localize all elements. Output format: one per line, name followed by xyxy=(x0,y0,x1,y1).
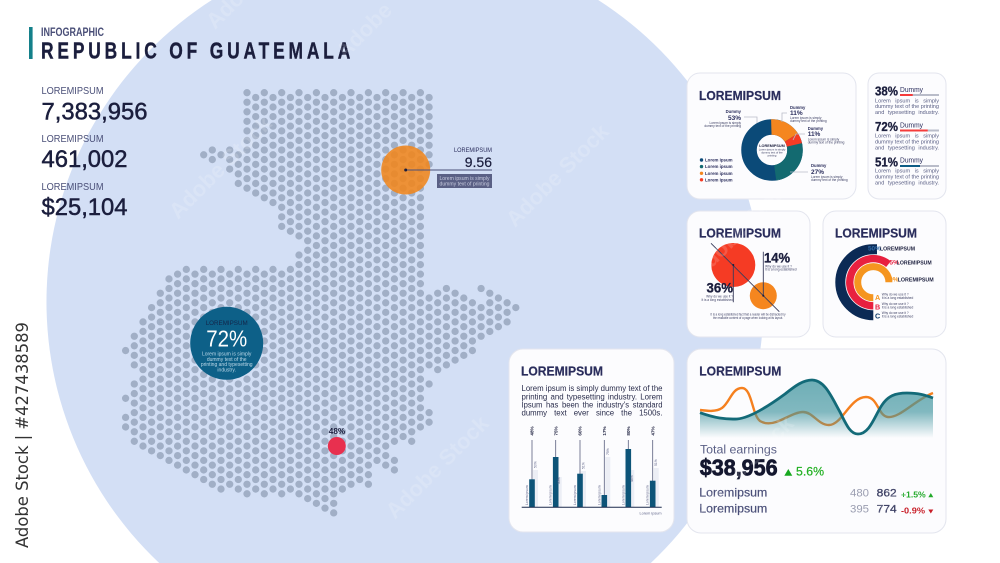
bar value labels: 75% xyxy=(553,426,558,436)
description text: Ipsum has been the industry's standard xyxy=(522,400,662,409)
legend: Lorem ipsum xyxy=(705,171,733,176)
bar axis labels xyxy=(525,448,662,515)
bar axis labels: Lorem ipsum xyxy=(525,485,529,505)
legend: Lorem ipsum xyxy=(705,164,733,169)
row 51%: 51% xyxy=(875,156,898,170)
panel: bubble comparison: 14% xyxy=(764,249,791,265)
description text: dummy text ever since the 1500s. xyxy=(522,409,662,418)
row 38%: Dummy xyxy=(900,87,923,94)
panel: radial rings: B xyxy=(875,302,880,311)
callout: blue circle 72%: LOREMIPSUM xyxy=(206,320,248,327)
leader lines xyxy=(744,113,808,172)
row 2 xyxy=(699,502,933,516)
title block: REPUBLIC OF GUATEMALA xyxy=(41,38,354,64)
panel: radial rings: 80% xyxy=(886,277,899,284)
bar axis labels: 50% xyxy=(534,461,538,468)
key statistics xyxy=(42,85,148,221)
donut xyxy=(749,127,795,173)
bar axis labels: 35% xyxy=(557,477,561,484)
panel: donut chart: dummy text of the printing xyxy=(811,178,848,182)
panel: donut chart: printing xyxy=(768,154,777,158)
callout: blue circle 72%: 72% xyxy=(206,326,247,352)
key statistics: 461,002 xyxy=(42,146,128,173)
bars xyxy=(522,440,662,507)
line chart xyxy=(700,380,933,438)
row 2: 395 xyxy=(850,504,869,516)
callout: blue circle 72%: Lorem ipsum is simply xyxy=(202,351,252,357)
panel: donut chart: LOREMIPSUM xyxy=(699,89,781,103)
panel: bubble comparison: It is a long established fact that a reader will be distracted by xyxy=(710,313,786,317)
panel: radial rings: LOREMIPSUM xyxy=(897,260,932,266)
callout: orange circle 9.56: LOREMIPSUM xyxy=(454,147,492,154)
bar axis labels: Lorem ipsum xyxy=(621,485,625,505)
panel: donut chart: 11% xyxy=(790,110,803,117)
panel: bubble comparison: 36% xyxy=(706,279,734,295)
panel: donut chart: LOREMIPSUM xyxy=(759,143,785,148)
watermarks: Adobe Stock xyxy=(686,170,799,284)
callout: orange circle 9.56: Lorem ipsum is simply xyxy=(440,176,490,182)
title block: INFOGRAPHIC xyxy=(41,25,104,39)
row 38%: and typesetting industry. xyxy=(875,110,939,116)
row 72% xyxy=(875,120,939,152)
panel: donut chart: Lorem ipsum is simply xyxy=(811,175,843,179)
row 72%: Dummy xyxy=(900,122,923,129)
row 1: 480 xyxy=(850,488,869,500)
description text xyxy=(522,384,663,418)
panel: bar chart: LOREMIPSUM xyxy=(521,365,603,379)
panel: radial rings: 75% xyxy=(886,259,899,266)
description text: printing and typesetting industry. Lorem xyxy=(522,392,663,401)
callout: red dot 48% xyxy=(328,427,346,455)
callout: blue circle 72% xyxy=(190,307,263,380)
callout: red dot 48%: 48% xyxy=(329,427,346,436)
panel: donut chart: 27% xyxy=(811,169,824,176)
panel: donut chart: dummy text of the printing xyxy=(704,124,741,128)
bar axis labels: Lorem ipsum xyxy=(549,485,553,505)
panel: earnings: $38,956 xyxy=(700,455,778,481)
panel: donut chart: Lorem ipsum is simply xyxy=(709,121,741,125)
callout: orange circle 9.56 xyxy=(381,146,492,194)
bar axis labels: Lorem ipsum xyxy=(573,485,577,505)
panel: radial rings: C xyxy=(875,311,880,320)
stock id vertical text: Adobe Stock | #427438589 xyxy=(13,322,32,548)
panel: radial rings: LOREMIPSUM xyxy=(880,246,915,252)
panel: donut chart: Lorem ipsum is simply xyxy=(759,148,786,152)
panel: donut chart: Dummy xyxy=(811,163,827,168)
panel: donut chart: 53% xyxy=(728,115,741,122)
panel: radial rings: It is a long established xyxy=(882,314,913,318)
callout: blue circle 72%: industry. xyxy=(217,368,236,374)
panel: bubble comparison: the readable content of a page when looking at its layout. xyxy=(713,316,783,320)
panel: radial rings: Why do we use it ? xyxy=(882,311,909,315)
watermarks: Adobe Stock xyxy=(686,410,799,524)
bar axis labels: 75% xyxy=(606,448,610,455)
panel: radial rings: LOREMIPSUM xyxy=(835,227,917,241)
row 72%: 72% xyxy=(875,120,898,134)
bar value labels: 60% xyxy=(578,426,583,436)
bar axis labels: Lorem ipsum xyxy=(597,485,601,505)
panel: radial rings: A xyxy=(875,293,880,302)
panel: radial rings: Why do we use it ? xyxy=(882,293,909,297)
row 72%: Lorem ipsum is simply xyxy=(875,134,939,140)
row 1 xyxy=(699,486,933,500)
row 51%: and typesetting industry. xyxy=(875,181,939,187)
watermarks: Adobe Stock xyxy=(381,410,494,524)
bar axis labels: 51% xyxy=(654,459,658,466)
panel: donut chart xyxy=(687,73,856,199)
panel: donut chart: Dummy xyxy=(808,126,824,131)
row 38% xyxy=(875,85,939,116)
bar axis labels: 51% xyxy=(582,462,586,469)
row 38%: dummy text of the printing xyxy=(875,104,939,110)
panel: earnings: 5.6% xyxy=(796,467,824,479)
callout: orange circle 9.56: 9.56 xyxy=(465,154,492,170)
bar axis labels: Lorem ipsum xyxy=(646,485,650,505)
key statistics: LOREMIPSUM xyxy=(42,85,104,97)
panel: bubble comparison: It is a long established xyxy=(701,298,733,302)
panel: bubble comparison: Why do we use it ? xyxy=(765,264,792,268)
row 51% xyxy=(875,156,939,187)
watermarks: Adobe xyxy=(866,457,932,524)
panel: bubble comparison: LOREMIPSUM xyxy=(699,227,781,241)
panel: donut chart: Lorem ipsum is simply xyxy=(808,138,840,142)
panel: donut chart: dummy text of the printing xyxy=(790,119,827,123)
legend: Lorem ipsum xyxy=(705,158,733,163)
key statistics: LOREMIPSUM xyxy=(42,181,104,193)
panel: radial rings: It is a long established xyxy=(882,296,913,300)
key statistics: $25,104 xyxy=(42,194,128,221)
key statistics: LOREMIPSUM xyxy=(42,133,104,145)
panel: donut chart: dummy text of the printing xyxy=(808,141,845,145)
icon: up triangle xyxy=(784,469,792,476)
legend xyxy=(700,158,733,182)
panel: percentage bars xyxy=(868,73,946,199)
title block xyxy=(29,25,354,64)
panel: donut chart: 11% xyxy=(808,131,821,138)
panel: bar chart xyxy=(509,349,674,532)
panel: radial rings: Why do we use it ? xyxy=(882,302,909,306)
row 72%: dummy text of the printing xyxy=(875,140,939,146)
row 38%: Lorem ipsum is simply xyxy=(875,98,939,104)
panel: radial rings: It is a long established xyxy=(882,305,913,309)
row 38%: 38% xyxy=(875,85,898,99)
row 51%: Dummy xyxy=(900,158,923,165)
background circle xyxy=(46,0,764,563)
callout: orange circle 9.56: dummy text of printing xyxy=(440,181,490,187)
key statistics: 7,383,956 xyxy=(42,98,148,126)
dotted map of Guatemala xyxy=(126,93,516,513)
row 2: -0.9% xyxy=(901,506,926,515)
legend: Lorem ipsum xyxy=(705,177,733,182)
watermarks: Adobe Stock xyxy=(164,110,277,224)
row 2: Loremipsum xyxy=(699,502,767,516)
callout: blue circle 72%: dummy text of the xyxy=(207,357,247,363)
bar value labels xyxy=(530,426,655,436)
row 72%: and typesetting industry. xyxy=(875,146,939,152)
panel: earnings: Total earnings xyxy=(700,442,777,456)
row 51%: Lorem ipsum is simply xyxy=(875,169,939,175)
bar axis labels: 46% xyxy=(630,475,634,482)
panel: radial rings: 50% xyxy=(868,245,881,252)
panel: radial rings: LOREMIPSUM xyxy=(898,278,934,284)
row 1: +1.5% xyxy=(901,490,926,499)
panel: radial rings xyxy=(823,211,946,337)
panel: donut chart: dummy text of the xyxy=(761,151,783,155)
rings xyxy=(840,249,889,315)
watermarks: Adobe Stock xyxy=(501,118,614,232)
panel: earnings: LOREMIPSUM xyxy=(699,365,781,379)
row 1: Loremipsum xyxy=(699,486,767,500)
description text: Lorem ipsum is simply dummy text of the xyxy=(522,384,663,393)
bar value labels: 80% xyxy=(626,426,631,436)
panel: bubble comparison: It is a long established xyxy=(765,268,797,272)
panel: earnings xyxy=(687,349,946,533)
panel: donut chart: Dummy xyxy=(790,105,806,110)
bar value labels: 48% xyxy=(530,426,535,436)
row 51%: dummy text of the printing xyxy=(875,175,939,181)
row 1: 862 xyxy=(877,488,897,500)
bubbles xyxy=(711,243,779,312)
panel: bubble comparison: Why do we use it ? xyxy=(706,295,733,299)
bar value labels: 47% xyxy=(650,426,655,436)
callout: blue circle 72%: printing and typesetting xyxy=(201,362,253,368)
panel: donut chart: Dummy xyxy=(726,109,742,114)
panel: donut chart: Lorem ipsum is simply xyxy=(790,116,822,120)
bar axis labels: Lorem ipsum xyxy=(640,511,662,515)
panel: bubble comparison xyxy=(687,211,810,337)
row 2: 774 xyxy=(877,504,897,516)
bar value labels: 17% xyxy=(602,426,607,436)
